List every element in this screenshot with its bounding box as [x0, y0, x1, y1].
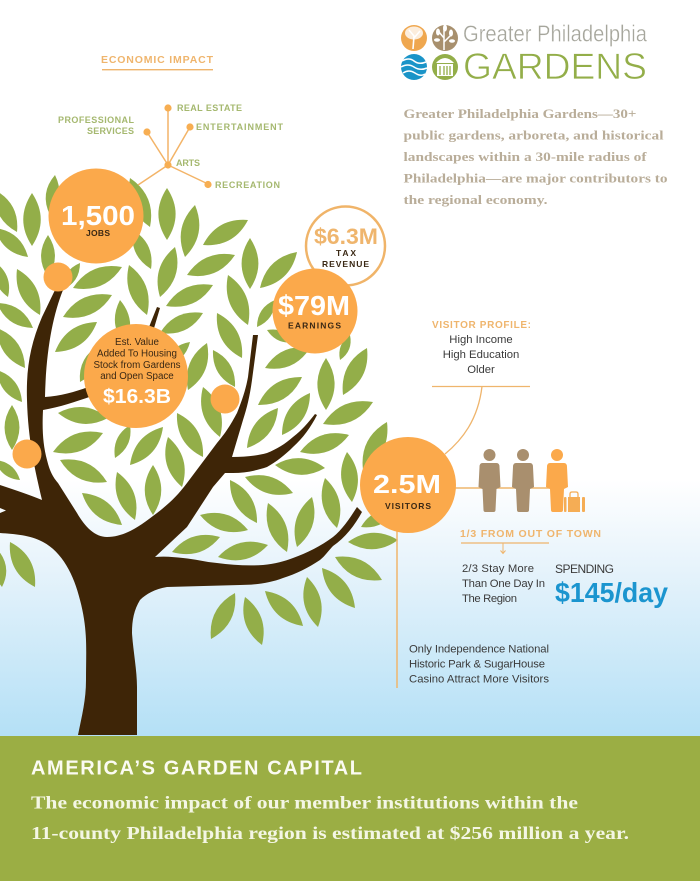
stat: 16.3B housing value: and Open Space	[100, 371, 174, 382]
intro paragraph	[404, 106, 668, 207]
stat: 79M earnings: $79M	[278, 290, 350, 321]
stat: 6.3M tax revenue: $6.3M	[314, 224, 378, 249]
stat: 2.5M visitors: 2.5M	[373, 469, 441, 499]
economic impact sectors diagram: ENTERTAINMENT	[196, 122, 284, 132]
visitor profile callout: High Education	[443, 349, 519, 361]
tree trunk and branches	[0, 290, 362, 735]
visitor profile callout: Older	[467, 364, 495, 376]
vertical line to visitor rank note	[396, 530, 398, 688]
visitor rank note	[409, 644, 549, 686]
intro paragraph: public gardens, arboreta, and historical	[404, 128, 664, 142]
out of town stat: 1/3 FROM OUT OF TOWN	[460, 528, 601, 540]
visitor profile callout: High Income	[449, 334, 513, 346]
stat: 16.3B housing value: Added To Housing	[97, 348, 177, 360]
stat: 6.3M tax revenue	[306, 206, 385, 286]
intro paragraph: Greater Philadelphia Gardens—30+	[404, 106, 636, 121]
stat: 79M earnings: EARNINGS	[288, 320, 341, 330]
visitor rank note: Casino Attract More Visitors	[409, 674, 549, 686]
spending stat: $145/day	[555, 577, 668, 608]
stat: 79M earnings	[272, 268, 358, 354]
stat: 16.3B housing value: $16.3B	[103, 386, 171, 408]
stat: 1,500 jobs: 1,500	[61, 200, 135, 231]
stat: 1,500 jobs	[48, 168, 144, 264]
tree leaves	[0, 175, 398, 645]
out of town stat: 2/3 Stay More	[462, 563, 534, 575]
spending stat	[555, 562, 668, 608]
stat: 1,500 jobs: JOBS	[86, 228, 110, 238]
small fruit circles	[12, 262, 240, 468]
stat: 2.5M visitors	[360, 437, 456, 533]
visitor rank note: Historic Park & SugarHouse	[409, 658, 545, 670]
economic impact sectors diagram: PROFESSIONAL	[58, 115, 134, 125]
logo: Greater Philadelphia	[463, 20, 648, 46]
intro paragraph: the regional economy.	[404, 192, 548, 207]
visitor profile callout	[432, 320, 531, 454]
footer heading: AMERICA’S GARDEN CAPITAL	[31, 758, 362, 780]
stat: 6.3M tax revenue: TAX	[336, 248, 356, 258]
visitor profile callout: VISITOR PROFILE:	[432, 320, 531, 331]
visitor rank note: Only Independence National	[409, 644, 549, 656]
footer band	[0, 736, 700, 881]
stat: 16.3B housing value	[84, 324, 188, 428]
economic impact sectors diagram: RECREATION	[215, 180, 280, 190]
icon: visitors people	[478, 449, 585, 512]
footer text	[31, 792, 629, 843]
icon: suitcase	[564, 492, 585, 512]
out of town stat: The Region	[462, 593, 517, 605]
economic impact sectors diagram	[58, 103, 284, 190]
logo	[401, 20, 648, 87]
icon: orange tree	[401, 25, 427, 51]
footer text: The economic impact of our member institutions within the	[31, 792, 578, 812]
out of town stat: Than One Day In	[462, 578, 545, 590]
stat: 16.3B housing value: Stock from Gardens	[93, 360, 181, 371]
icon: blue water	[401, 54, 427, 80]
economic impact sectors diagram: SERVICES	[87, 126, 134, 136]
icon: green temple	[432, 54, 458, 80]
footer text: 11-county Philadelphia region is estimated at $256 million a year.	[31, 823, 629, 843]
connector line to people	[450, 487, 552, 489]
economic impact sectors diagram: REAL ESTATE	[177, 103, 242, 113]
stat: 6.3M tax revenue: REVENUE	[322, 259, 369, 269]
stat: 16.3B housing value: Est. Value	[115, 337, 160, 348]
logo: GARDENS	[463, 45, 647, 87]
economic impact sectors diagram: ARTS	[176, 158, 200, 168]
intro paragraph: Philadelphia—are major contributors to	[404, 170, 668, 186]
out of town stat	[460, 528, 601, 605]
icon: taupe tree	[432, 24, 458, 51]
spending stat: SPENDING	[555, 562, 614, 576]
intro paragraph: landscapes within a 30-mile radius of	[404, 149, 647, 164]
heading: economic impact: ECONOMIC IMPACT	[101, 54, 214, 66]
stat: 2.5M visitors: VISITORS	[385, 501, 431, 511]
